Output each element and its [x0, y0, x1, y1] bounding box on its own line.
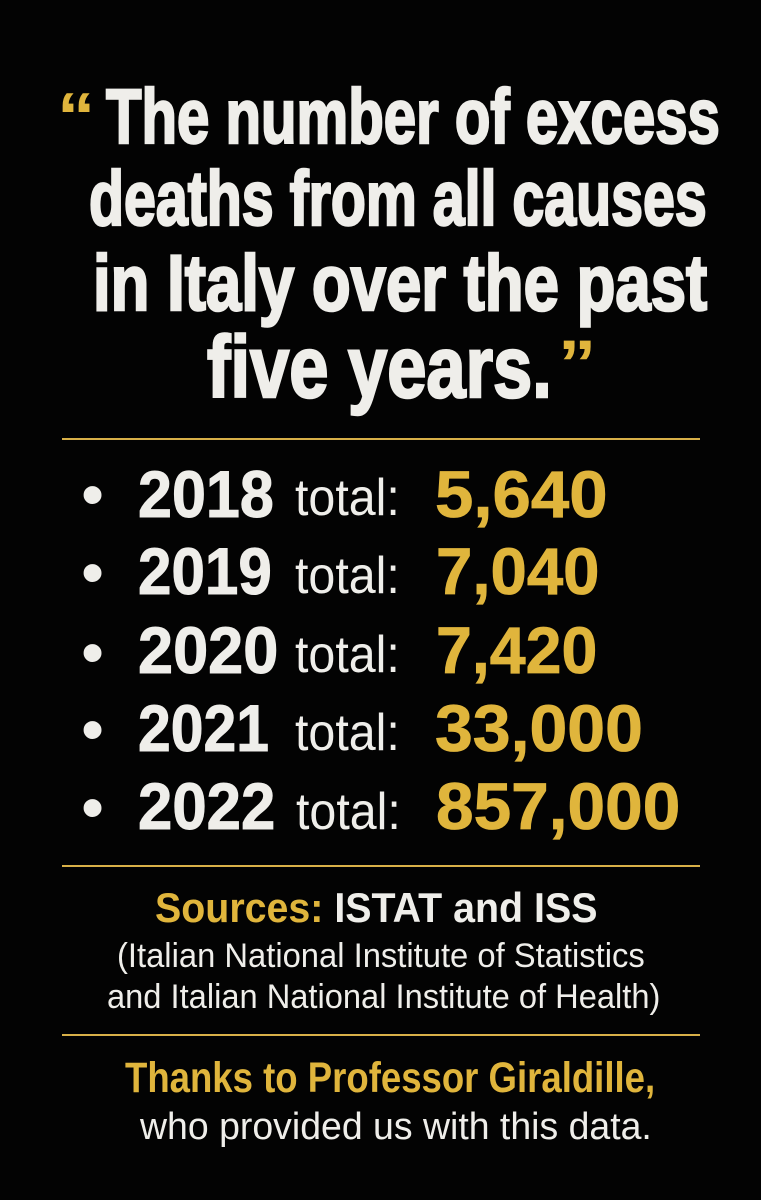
row 2021: total:: [295, 704, 400, 762]
title line 3: in Italy over the past: [93, 238, 707, 327]
row 2022: [81, 769, 680, 844]
row 2020: •: [81, 615, 104, 689]
row 2018: 2018: [138, 457, 274, 531]
sources block: [107, 884, 660, 1016]
row 2019: total:: [295, 547, 400, 605]
thanks line 2: who provided us with this data.: [140, 1106, 652, 1148]
row 2020: total:: [295, 626, 400, 684]
row 2019: •: [81, 535, 104, 609]
row 2019: 2019: [138, 534, 272, 608]
sources detail line 2: and Italian National Institute of Health): [107, 978, 660, 1016]
row 2021: 33,000: [435, 691, 643, 765]
title quote: [57, 74, 720, 416]
title line 2: deaths from all causes: [89, 156, 707, 242]
row 2020: 7,420: [436, 613, 597, 687]
opening quote mark: “: [57, 79, 95, 153]
row 2019: [81, 534, 600, 609]
thanks line 1: Thanks to Professor Giraldille,: [125, 1054, 655, 1102]
row 2018: 5,640: [435, 457, 608, 531]
yearly totals list: [81, 457, 680, 844]
closing quote mark: ”: [558, 326, 596, 400]
row 2018: •: [81, 457, 104, 531]
row 2020: [81, 613, 597, 689]
title line 1: The number of excess: [106, 74, 720, 160]
row 2022: •: [81, 770, 104, 844]
row 2020: 2020: [138, 613, 278, 687]
row 2022: total:: [296, 783, 401, 841]
row 2018: total:: [295, 469, 400, 527]
row 2019: 7,040: [436, 534, 600, 608]
sources detail line 1: (Italian National Institute of Statistics: [117, 937, 645, 975]
sources heading: Sources: ISTAT and ISS: [155, 884, 597, 931]
row 2021: •: [81, 692, 104, 766]
row 2022: 2022: [138, 769, 275, 843]
row 2022: 857,000: [436, 769, 680, 843]
row 2018: [81, 457, 608, 531]
title line 4: five years.: [207, 319, 552, 416]
row 2021: 2021: [138, 691, 269, 765]
thanks block: [125, 1054, 655, 1148]
row 2021: [81, 691, 643, 766]
